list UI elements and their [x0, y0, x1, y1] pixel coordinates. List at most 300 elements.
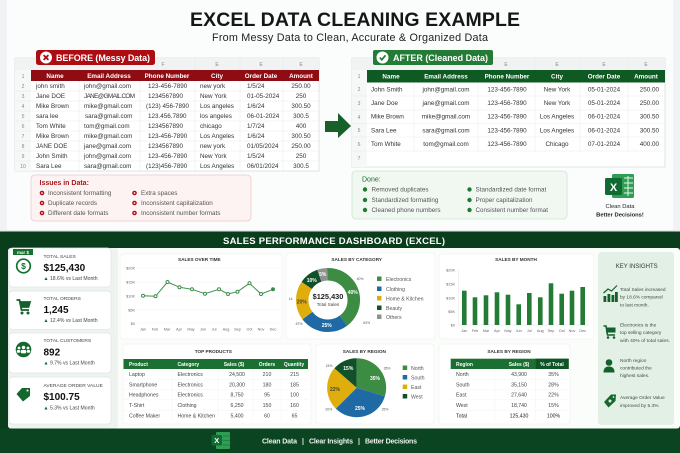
legend: region: West [411, 394, 423, 400]
panel: top products: 210 [263, 372, 271, 378]
panel: top products: 160 [290, 403, 299, 409]
issues callout: Extra spaces [141, 190, 177, 197]
panel: before table: Los Angeles [200, 133, 234, 140]
panel: sales by region table: 100% [547, 414, 561, 420]
panel: sales over time: Oct [247, 328, 253, 332]
panel: sales over time: SALES OVER TIME [178, 257, 221, 262]
panel: before table: 300.50 [291, 103, 311, 110]
legend: region [403, 366, 425, 400]
panel: sales over time: $15K [126, 280, 135, 284]
panel: sales by region table: SALES BY REGION [487, 349, 531, 354]
footer: Clean Data [262, 438, 297, 446]
panel: after table: Email Address [424, 74, 468, 80]
panel: before table: 1/5/24 [247, 83, 265, 90]
panel: after table: sara@gmail.com [422, 127, 470, 134]
panel: sales by category: SALES BY CATEGORY [331, 257, 383, 262]
issues callout: Issues in Data: [40, 180, 89, 187]
panel: top products: 6,250 [231, 403, 244, 409]
panel: key insights: Average Order Value [620, 395, 665, 401]
donut chart: 67% [296, 322, 302, 326]
panel: sales by month: Nov [569, 329, 575, 333]
panel: before table: new york [200, 83, 226, 90]
panel: key insights: Total Sales increased [620, 287, 666, 293]
panel: before table: F [161, 62, 165, 68]
done callout: Cleaned phone numbers [372, 207, 440, 214]
panel: top products: 150 [263, 403, 271, 409]
panel: key insights: improved by 5.3%. [620, 403, 660, 409]
panel: after table: 07-01-2024 [588, 141, 621, 148]
panel: sales over time: Nov [258, 328, 264, 332]
panel: top products: Home & Kitchen [178, 413, 215, 419]
dashboard background [0, 230, 680, 453]
panel: before table [15, 58, 319, 171]
panel: top products [123, 344, 311, 424]
panel: total customers [9, 333, 111, 373]
panel: key insights: KEY INSIGHTS [616, 264, 658, 270]
panel: sales by region table: 35,150 [511, 382, 527, 388]
panel: before table: 123-456-7890 [148, 133, 188, 140]
panel: after table: 1 [358, 74, 361, 80]
panel: sales over time: Dec [270, 328, 276, 332]
icon: person [604, 359, 614, 372]
panel: sales by category [286, 253, 435, 339]
pie chart: 25% [382, 408, 388, 412]
donut chart: 5% [319, 272, 327, 278]
subtitle: From Messy Data to Clean, Accurate & Organized Data [212, 32, 488, 44]
issues callout: Inconsistent formatting [48, 190, 112, 197]
donut chart: 25% [322, 323, 332, 329]
panel: top products: Clothing [178, 403, 197, 409]
issues callout: Inconsistent capitalization [141, 200, 213, 207]
panel: sales over time [120, 254, 282, 339]
panel: top products: Electronics [178, 393, 203, 399]
panel: after table: tom@gmail.com [423, 141, 469, 148]
panel: before table: Jane DOE [36, 93, 65, 100]
panel: sales by region table: West [456, 403, 468, 409]
title: EXCEL DATA CLEANING EXAMPLE [190, 9, 520, 31]
panel: top products: TOP PRODUCTS [195, 349, 232, 354]
panel: after table [352, 58, 665, 167]
panel: after table: City [551, 74, 563, 80]
panel: before table: 250 [296, 153, 307, 160]
panel: top products: 8,750 [231, 393, 244, 399]
panel: before table: sara lee [36, 113, 59, 120]
icon: footer excel logo: X [214, 436, 219, 445]
panel: after table: 300.50 [640, 127, 659, 134]
panel: after table: 300.50 [640, 114, 659, 121]
panel: before table: new york [200, 143, 226, 150]
legend: category: Electronics [386, 277, 412, 283]
donut chart [289, 272, 370, 329]
panel: sales by region table: South [456, 382, 470, 388]
donut chart: $125,430 [313, 292, 343, 301]
panel: before table: Name [46, 73, 64, 80]
panel: key insights: by 18.6% compared [620, 295, 663, 301]
icon: money tag [604, 394, 616, 408]
panel: before table: JANE DOE [36, 143, 68, 150]
donut chart: 20% [297, 300, 307, 306]
panel: after table: Los Angeles [540, 114, 574, 121]
panel: total sales [9, 248, 111, 287]
panel: sales by region table: Total [456, 414, 467, 420]
panel: before table: los angeles [200, 113, 232, 120]
panel: average order value: $100.75 [44, 392, 80, 403]
before badge [36, 50, 155, 65]
panel: top products: 5,400 [231, 413, 244, 419]
panel: top products: Laptop [129, 372, 145, 378]
arrow [325, 113, 351, 138]
panel: top products: Electronics [178, 382, 203, 388]
issues callout: Duplicate records [48, 200, 97, 207]
issues callout: Inconsistent number formats [141, 210, 220, 217]
pie chart: 20% [325, 408, 332, 412]
panel: sales over time: Jan [140, 328, 146, 332]
panel: sales over time: Apr [176, 328, 183, 332]
panel: after table: Name [382, 74, 400, 80]
issues callout [31, 175, 251, 221]
panel: before table: 6 [22, 124, 25, 130]
panel: before table: mike@gmail.com [84, 103, 132, 110]
panel: after table: New York [544, 86, 571, 93]
panel: top products: 100 [290, 393, 299, 399]
donut chart: 40% [357, 277, 363, 281]
panel: sales by region table: East [456, 393, 467, 399]
panel: total customers: 892 [44, 348, 61, 358]
bar chart [462, 283, 585, 325]
panel: top products: Coffee Maker [129, 413, 160, 419]
panel: sales by month: Jan [461, 329, 467, 333]
panel: sales by month: Oct [559, 329, 566, 333]
panel: before table: john smith [35, 83, 65, 90]
panel: sales over time: May [187, 328, 195, 332]
panel: before table: 250.00 [291, 83, 311, 90]
panel: total orders [9, 291, 111, 330]
panel: before table: tom@gmail.com [84, 123, 130, 130]
panel: sales over time: Sep [234, 328, 241, 332]
pie chart [325, 358, 390, 417]
caption: clean data [596, 204, 644, 218]
panel: sales by month: $0 [451, 324, 455, 328]
panel: sales by region table: 125,430 [510, 414, 528, 420]
panel: before table: 5 [22, 114, 25, 120]
panel: after table: Tom White [371, 141, 401, 148]
panel: before table: 1 [22, 74, 25, 80]
panel: after table: 06-01-2024 [588, 114, 621, 121]
pie chart: 35% [370, 376, 381, 382]
panel: sales by region pie [316, 344, 434, 424]
panel: after table: 250.00 [640, 100, 659, 107]
footer [212, 432, 417, 449]
done callout: Consistent number format [476, 207, 548, 214]
panel: top products: Smartphone [129, 382, 157, 388]
panel: top products: Category [178, 362, 199, 368]
panel: before table: 123-456-7890 [148, 153, 188, 160]
panel: before table: 250 [296, 93, 307, 100]
panel: after table: 3 [358, 101, 361, 107]
panel: top products: 24,500 [229, 372, 245, 378]
panel: key insights [598, 252, 674, 425]
footer: | [302, 438, 304, 446]
panel: sales by month: Aug [537, 329, 544, 333]
panel: after table: 123-456-7890 [487, 127, 527, 134]
panel: top products: 60 [264, 413, 270, 419]
panel: sales by region table: 43,900 [511, 372, 527, 378]
panel: before table: 1/5/24 [247, 153, 265, 160]
panel: after table: E [602, 62, 606, 68]
panel: top products: Sales ($) [224, 362, 245, 368]
panel: sales by month: Dec [579, 329, 586, 333]
pie chart: 15% [343, 366, 354, 372]
panel: sales over time: Mar [164, 328, 171, 332]
panel: before table: 06-01-2024 [247, 113, 280, 120]
panel: before table: Phone Number [145, 73, 190, 80]
panel: sales by region table [439, 344, 570, 424]
panel: sales by month: $10K [446, 296, 455, 300]
legend: category: Clothing [386, 287, 405, 293]
panel: sales by region table: North [456, 372, 469, 378]
panel: total sales: TOTAL SALES [44, 254, 76, 260]
panel: key insights: highest sales. [620, 373, 649, 379]
done callout: Standardized formatting [372, 197, 439, 204]
panel: after table: New York [544, 100, 571, 107]
panel: before table: 8 [22, 144, 25, 150]
panel: sales by region table: Region [456, 362, 473, 368]
panel: sales by region table: 15% [548, 403, 559, 409]
donut chart: Total Sales [317, 302, 340, 307]
icon: excel logo: X [610, 182, 618, 194]
panel: sales over time: $0 [131, 322, 135, 326]
panel: before table: john@gmail.com [83, 83, 131, 90]
panel: before table: 01/05/2024 [247, 143, 279, 150]
panel: before table: 1/7/24 [247, 123, 265, 130]
panel: before table: 4 [22, 104, 25, 110]
panel: total orders: 1,245 [44, 305, 69, 316]
panel: before table: sara@gmail.com [84, 163, 131, 170]
caption: clean data: Clean Data [605, 204, 635, 210]
panel: after table: E [644, 62, 648, 68]
panel: sales by month: $15K [446, 282, 455, 286]
issues callout: Different date formats [48, 210, 108, 217]
panel: after table: Los Angeles [540, 127, 574, 134]
panel: top products: Quantity [284, 362, 304, 368]
pie chart: 15% [326, 364, 332, 368]
legend: region: North [411, 366, 424, 372]
legend: category [377, 276, 424, 321]
panel: sales by month: Jun [516, 329, 522, 333]
panel: after table: 123-456-7890 [487, 86, 527, 93]
panel: before table: Sara Lee [36, 163, 62, 170]
panel: after table: 05-01-2024 [588, 86, 621, 93]
panel: sales by region table: 27,640 [511, 393, 527, 399]
panel: total sales: $125,430 [44, 263, 86, 274]
panel: top products: 20,300 [229, 382, 245, 388]
panel: sales over time: $20K [126, 266, 135, 270]
panel: before table: E [299, 62, 303, 68]
panel: before table: JANE@GMAIL.COM [84, 93, 135, 100]
panel: before table: Los angeles [200, 103, 234, 110]
panel: before table: Order Date [245, 73, 278, 80]
donut chart: 14 [289, 297, 293, 301]
panel: key insights: with 40% of total sales. [620, 338, 670, 344]
done callout: Removed duplicates [372, 186, 429, 194]
panel: before table: 1/6/24 [247, 103, 265, 110]
panel: before table: (123) 456-7890 [146, 103, 190, 110]
panel: after table: 06-01-2024 [588, 127, 621, 134]
panel: before table: 01-05-2024 [247, 93, 280, 100]
panel: after table: 123-456-7890 [487, 141, 527, 148]
panel: before table: 1234567890 [148, 93, 184, 100]
panel: total sales: ▲ 18.6% vs Last Month [44, 276, 98, 282]
panel: before table: mike@gmail.com [84, 133, 132, 140]
panel: after table: 4 [358, 115, 361, 121]
panel: sales over time: Jul [212, 328, 217, 332]
done callout: Proper capitalization [476, 197, 533, 204]
panel: key insights: to last month. [620, 302, 649, 308]
panel: after table: E [504, 62, 508, 68]
panel: key insights: Electronics is the [620, 322, 657, 328]
panel: before table: jane@gmail.com [83, 143, 131, 150]
panel: after table: 7 [358, 156, 361, 162]
panel: top products: Orders [259, 362, 275, 368]
panel: average order value: AVERAGE ORDER VALUE [44, 383, 104, 389]
panel: after table: Chicago [545, 141, 569, 148]
icon: cart [604, 326, 616, 339]
icon: footer excel logo [212, 432, 230, 449]
panel: before table: 9 [22, 154, 25, 160]
done callout: Standardized date format [476, 186, 546, 194]
panel: total sales: $ [21, 261, 26, 271]
panel: before table: 300.5 [293, 163, 309, 170]
panel: top products: 95 [264, 393, 270, 399]
panel: sales by region table: Sales ($) [509, 362, 530, 368]
panel: before table: 123.456.7890 [148, 113, 187, 120]
panel: before table: sara@gmail.com [85, 113, 132, 120]
line chart [142, 280, 274, 298]
panel: key insights: contributed the [620, 366, 652, 372]
panel: before table: E [259, 62, 263, 68]
panel: before table: 123-456-7890 [148, 83, 188, 90]
panel: before table: 10 [20, 164, 26, 170]
panel: after table: 123-456-7890 [487, 114, 527, 121]
panel: before table: 1/6/24 [247, 133, 265, 140]
panel: before table: Mike Brown [36, 133, 69, 140]
panel: after table: 05-01-2024 [588, 100, 621, 107]
panel: before table: New York [200, 153, 227, 160]
panel: before table: 1234567890 [148, 143, 184, 150]
panel: sales by region pie: SALES BY REGION [343, 349, 386, 354]
panel: after table: Jane Doe [371, 100, 398, 107]
panel: sales by region table: 35% [548, 372, 559, 378]
panel: top products: T-Shirt [129, 403, 145, 409]
panel: before table: Amount [289, 73, 314, 80]
footer: Better Decisions [365, 438, 417, 446]
legend: region: East [411, 385, 422, 391]
panel: total orders: ▲ 12.4% vs Last Month [44, 318, 98, 324]
after badge: AFTER (Cleaned Data) [393, 53, 488, 63]
panel: total sales: mar $ [17, 250, 29, 255]
panel: sales by month: Jul [527, 329, 532, 333]
panel: after table: 5 [358, 128, 361, 134]
pie chart: 22% [330, 387, 341, 393]
icon: growth chart [604, 286, 618, 302]
legend: region: South [411, 375, 425, 381]
panel: top products: Product [129, 362, 148, 368]
done callout [352, 171, 567, 219]
panel: key insights: top selling category [620, 330, 662, 336]
panel: sales by region table: 22% [548, 393, 559, 399]
panel: total customers: TOTAL CUSTOMERS [44, 338, 92, 344]
panel: key insights: North region [620, 358, 647, 364]
before badge: BEFORE (Messy Data) [56, 53, 150, 63]
panel: after table: 2 [358, 87, 361, 93]
panel: before table: john@gmail.com [83, 153, 131, 160]
panel: sales over time: Aug [223, 328, 229, 332]
panel: sales by month: SALES BY MONTH [495, 257, 538, 262]
footer: | [358, 438, 360, 446]
panel: after table: john@gmail.com [422, 86, 470, 93]
panel: top products: Headphones [129, 393, 159, 399]
donut chart: 63% [363, 321, 370, 325]
panel: sales by region table: 18,740 [511, 403, 527, 409]
panel: before table: 400 [296, 123, 307, 130]
panel: sales by month: Sep [548, 329, 554, 333]
panel: before table: New York [200, 93, 227, 100]
pie chart: 25% [355, 406, 366, 412]
panel: total customers: ▲ 9.7% vs Last Month [44, 360, 95, 366]
panel: sales over time: Feb [152, 328, 158, 332]
panel: after table: mike@gmail.com [422, 114, 470, 121]
icon: excel logo [605, 174, 634, 198]
panel: sales by region table: % of Total [540, 362, 564, 368]
panel: before table: chicago [200, 123, 222, 130]
panel: before table: 7 [22, 134, 25, 140]
panel: before table: 300.50 [291, 133, 311, 140]
panel: top products: Electronics [178, 372, 203, 378]
panel: sales over time: $10K [126, 294, 135, 298]
panel: before table: 1234567890 [148, 123, 184, 130]
panel: sales by month: $5K [448, 310, 455, 314]
panel: sales by month [439, 254, 594, 339]
panel: before table: 3 [22, 94, 25, 100]
pie chart: 35% [384, 366, 390, 370]
panel: sales by month: $20K [446, 268, 455, 272]
panel: after table: 123-456-7890 [487, 100, 527, 107]
panel: before table: Los Angeles [200, 163, 234, 170]
panel: sales by month: Apr [494, 329, 501, 333]
panel: after table: John Smith [371, 86, 403, 93]
after badge [373, 50, 493, 65]
panel: before table: 300.5 [293, 113, 309, 120]
done callout: Done: [362, 176, 381, 184]
panel: after table: Phone Number [485, 74, 530, 80]
panel: sales over time: Jun [200, 328, 206, 332]
panel: before table: 2 [22, 84, 25, 90]
panel: before table: John Smith [36, 153, 68, 160]
panel: after table: jane@gmail.com [422, 100, 470, 107]
panel: after table: E [555, 62, 559, 68]
panel: sales by month: May [504, 329, 512, 333]
panel: after table: 250.00 [640, 86, 659, 93]
panel: after table: 400.00 [640, 141, 659, 148]
panel: sales by region table: 28% [548, 382, 559, 388]
panel: after table: Order Date [588, 74, 621, 80]
panel: sales by month: Feb [472, 329, 478, 333]
panel: before table: 06/01/2024 [247, 163, 279, 170]
panel: average order value: ▲ 5.3% vs Last Month [44, 406, 95, 412]
panel: before table: (123)456-7890 [146, 163, 188, 170]
panel: before table: Mike Brown [36, 103, 69, 110]
donut chart: 40% [348, 290, 358, 296]
